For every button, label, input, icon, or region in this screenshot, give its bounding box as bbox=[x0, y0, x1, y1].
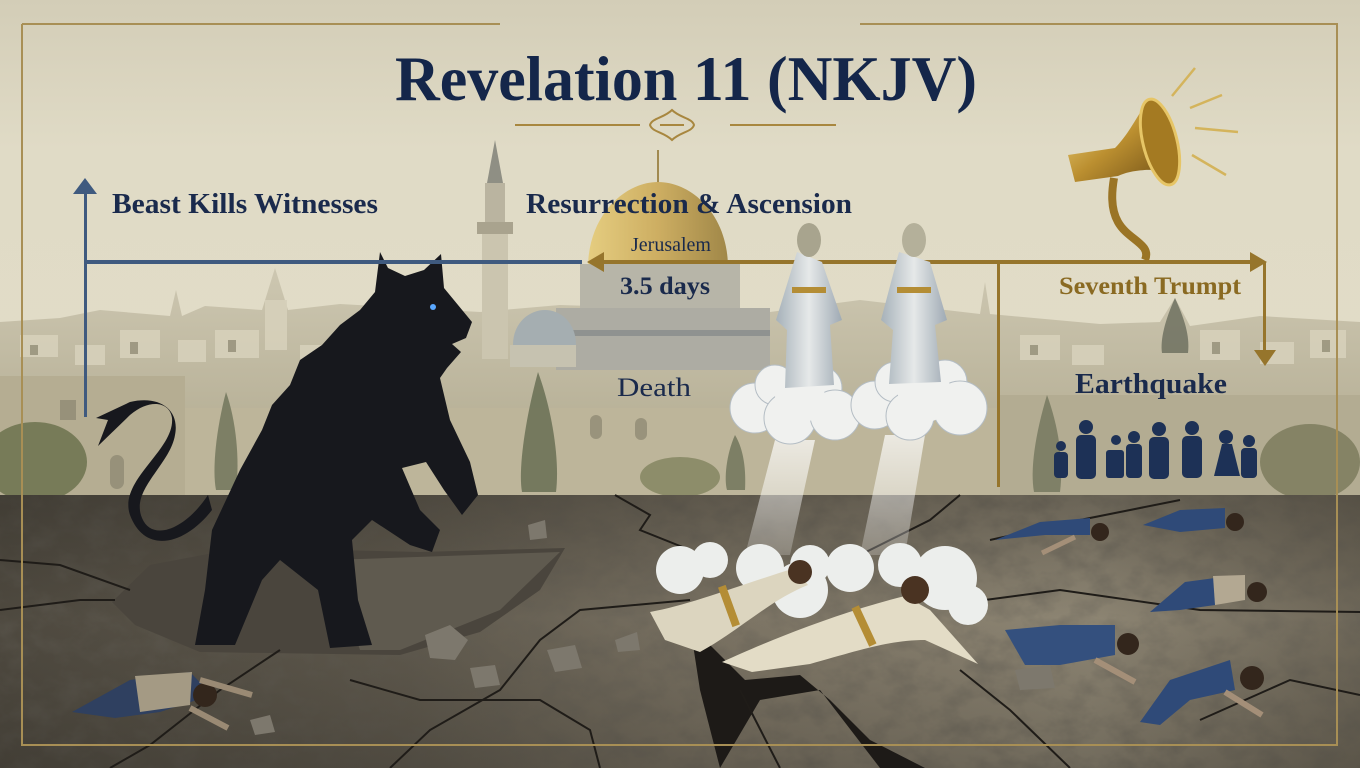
ground bbox=[0, 495, 1360, 768]
clouds under standing witnesses bbox=[730, 360, 987, 444]
pit in ground bbox=[112, 548, 565, 655]
beast bbox=[96, 252, 478, 648]
minaret bbox=[477, 140, 513, 359]
blue horizontal timeline bbox=[85, 260, 582, 264]
fallen body 3 bbox=[1150, 575, 1267, 612]
fallen witness left bbox=[650, 560, 812, 652]
fallen witness right bbox=[722, 576, 978, 672]
background: Jerusalem city bbox=[0, 268, 1360, 502]
label: 3.5 days: 3.5 days bbox=[620, 273, 710, 300]
fallen body 4 bbox=[1005, 625, 1139, 682]
label: Death: Death bbox=[617, 373, 691, 402]
title ornament bbox=[515, 110, 836, 140]
label: Beast Kills Witnesses: Beast Kills Witnesses bbox=[112, 188, 378, 220]
ground texture bbox=[0, 495, 1360, 768]
fallen body 5 bbox=[1140, 660, 1264, 725]
central chasm bbox=[690, 625, 925, 768]
label: Earthquake: Earthquake bbox=[1075, 368, 1227, 400]
fallen body 2 bbox=[1143, 508, 1244, 532]
beast eye bbox=[430, 304, 436, 310]
ground shading bbox=[0, 495, 1360, 768]
label: Resurrection & Ascension: Resurrection & Ascension bbox=[526, 188, 852, 220]
label: Seventh Trumpt: Seventh Trumpt bbox=[1059, 273, 1242, 300]
title: Revelation 11 (NKJV) bbox=[395, 43, 977, 114]
clouds under fallen witnesses bbox=[656, 542, 988, 625]
ascending witness right bbox=[881, 223, 947, 384]
fallen body 1 bbox=[995, 518, 1109, 553]
background: sky bbox=[0, 0, 1360, 500]
Dome of the Rock bbox=[510, 150, 770, 370]
fallen body bottom left bbox=[72, 672, 252, 728]
ground cracks bbox=[0, 495, 1360, 768]
icon: golden trumpet bbox=[1068, 68, 1238, 260]
people silhouettes bbox=[1054, 420, 1257, 479]
ascending witness left bbox=[776, 223, 842, 388]
gold timeline arrows bbox=[587, 252, 1276, 487]
label: Jerusalem: Jerusalem bbox=[631, 234, 711, 256]
rubble stones bbox=[250, 520, 1055, 735]
blue vertical arrow bbox=[73, 178, 97, 417]
light beams bbox=[745, 435, 925, 555]
beast tail bbox=[96, 400, 212, 541]
